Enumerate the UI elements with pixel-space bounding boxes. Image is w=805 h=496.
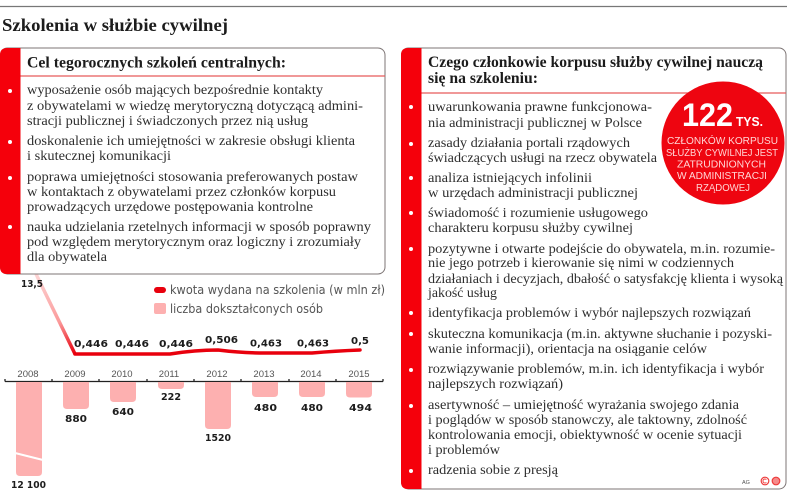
callout: 122 thousand employees: SŁUŻBY CYWILNEJ JEST <box>666 146 779 159</box>
left panel: training goals: nauka udzielania rzetelnych informacji w sposób poprawny <box>27 220 371 235</box>
line chart: amount spent on training <box>21 274 369 354</box>
callout: 122 thousand employees: TYS. <box>736 115 763 129</box>
right panel: what corps members will learn: radzenia sobie z presją <box>428 463 559 478</box>
right panel: what corps members will learn: wanie informacji), orientacja na osiąganie celów <box>428 342 708 357</box>
right panel: what corps members will learn: się na szkoleniu: <box>428 70 538 87</box>
callout: 122 thousand employees <box>662 82 784 204</box>
right panel: what corps members will learn: identyfikacja problemów i wybór najlepszych rozwiązań <box>428 306 751 321</box>
line chart: amount spent on training: 13,5 <box>21 279 43 290</box>
right panel: what corps members will learn: najlepszych rozwiązań) <box>428 377 563 392</box>
right panel: what corps members will learn: kontrolowania emocji, obiektywność w ocenie sytuacji <box>428 428 742 443</box>
left panel: training goals: prowadzących urzędowe postępowania kontrolne <box>27 200 313 215</box>
bar chart: number of people trained: 880 <box>65 414 87 425</box>
right panel: what corps members will learn: asertywność – umiejętność wyrażania swojego zdania <box>428 398 740 413</box>
line chart: amount spent on training: 0,446 <box>115 339 149 350</box>
right panel: what corps members will learn: zasady działania portali rządowych <box>428 136 630 151</box>
right panel: what corps members will learn: rozwiązywanie problemów, m.in. ich identyfikacja i wybór <box>428 362 764 377</box>
bar chart: number of people trained: 222 <box>161 392 181 403</box>
axis with years: 2015 <box>348 369 370 380</box>
line chart: amount spent on training: 0,446 <box>74 339 108 350</box>
left panel: training goals: w kontaktach z obywatelami przez członków korpusu <box>27 185 336 200</box>
bar chart: number of people trained: 480 <box>301 403 323 414</box>
line chart: amount spent on training: 0,506 <box>205 335 238 346</box>
bar chart: number of people trained <box>11 382 372 491</box>
right panel: what corps members will learn: i problemów <box>428 443 501 458</box>
right panel: what corps members will learn: analiza istniejących infolinii <box>428 171 592 186</box>
axis with years: 2011 <box>159 369 179 380</box>
right panel: what corps members will learn: pozytywne i otwarte podejście do obywatela, m.in. rozumie- <box>428 242 775 257</box>
right panel: what corps members will learn: nia administracji publicznej w Polsce <box>428 116 642 131</box>
callout: 122 thousand employees: RZĄDOWEJ <box>696 182 750 194</box>
left panel: training goals: dla obywatela <box>27 250 108 265</box>
right panel: what corps members will learn: jakość usług <box>427 286 497 301</box>
right panel: what corps members will learn: w urzędach administracji publicznej <box>428 186 638 201</box>
axis with years: 2012 <box>206 369 228 380</box>
left panel: training goals: Cel tegorocznych szkoleń centralnych: <box>27 54 286 72</box>
right panel: what corps members will learn: skuteczna komunikacja (m.in. aktywne słuchanie i pozyski- <box>428 327 772 342</box>
legend: kwota wydana na szkolenia (w mln zł) <box>170 283 385 297</box>
bar chart: number of people trained: 640 <box>112 407 134 418</box>
left panel: training goals <box>0 48 385 274</box>
right panel: what corps members will learn: charakteru korpusu służby cywilnej <box>428 221 633 236</box>
right panel: what corps members will learn: działaniach i decyzjach, dbałość o satysfakcję klienta i wysoką <box>428 272 784 287</box>
left panel: training goals: poprawa umiejętności stosowania preferowanych postaw <box>27 170 359 185</box>
line chart: amount spent on training: 0,446 <box>159 339 193 350</box>
right panel: what corps members will learn <box>401 48 786 489</box>
callout: 122 thousand employees: W ADMINISTRACJI <box>677 170 767 182</box>
axis with years <box>5 369 383 382</box>
right panel: what corps members will learn: świadczących usługi na rzecz obywatela <box>428 151 658 166</box>
right panel: what corps members will learn: nie jego potrzeb i kierowanie się nimi w codziennych <box>428 256 734 271</box>
left panel: training goals: stracji publicznej i świadczonych przez nią usług <box>27 114 308 129</box>
line chart: amount spent on training: 0,5 <box>351 336 369 347</box>
bar chart: number of people trained: 480 <box>254 403 277 414</box>
legend: liczba dokształconych osób <box>170 302 323 316</box>
axis with years: 2009 <box>64 369 86 380</box>
line chart: amount spent on training: 0,463 <box>250 338 282 350</box>
bar chart: number of people trained: 1520 <box>205 433 231 444</box>
left panel: training goals: pod względem merytorycznym oraz logiczny i zrozumiały <box>27 235 361 250</box>
axis with years: 2014 <box>300 369 322 380</box>
line chart: amount spent on training: 0,463 <box>297 338 329 350</box>
right panel: what corps members will learn: uwarunkowania prawne funkcjonowa- <box>428 100 652 115</box>
bar chart: number of people trained: 12 100 <box>11 480 46 491</box>
axis with years: 2013 <box>253 369 275 380</box>
callout: 122 thousand employees: CZŁONKÓW KORPUSU <box>667 134 778 147</box>
left panel: training goals: doskonalenie ich umiejętności w zakresie obsługi klienta <box>27 134 356 149</box>
legend <box>154 283 385 316</box>
bar chart: number of people trained: 494 <box>349 403 372 414</box>
right panel: what corps members will learn: i poglądów w sposób stanowczy, ale taktowny, zdolność <box>428 413 747 428</box>
right panel: what corps members will learn: świadomość i rozumienie usługowego <box>428 206 648 221</box>
left panel: training goals: z obywatelami w wiedzę merytoryczną dotyczącą admini- <box>27 99 363 114</box>
axis with years: 2008 <box>17 369 39 380</box>
axis with years: 2010 <box>111 369 133 380</box>
credit: author and copyright marks: AG <box>742 480 750 486</box>
callout: 122 thousand employees: 122 <box>682 97 733 133</box>
left panel: training goals: i skutecznej komunikacji <box>27 149 171 164</box>
credit: author and copyright marks <box>742 477 780 486</box>
callout: 122 thousand employees: ZATRUDNIONYCH <box>677 158 766 170</box>
title: Szkolenia w służbie cywilnej <box>2 15 228 35</box>
left panel: training goals: wyposażenie osób mających bezpośrednie kontakty <box>27 83 323 98</box>
right panel: what corps members will learn: Czego członkowie korpusu służby cywilnej nauczą <box>428 54 763 71</box>
